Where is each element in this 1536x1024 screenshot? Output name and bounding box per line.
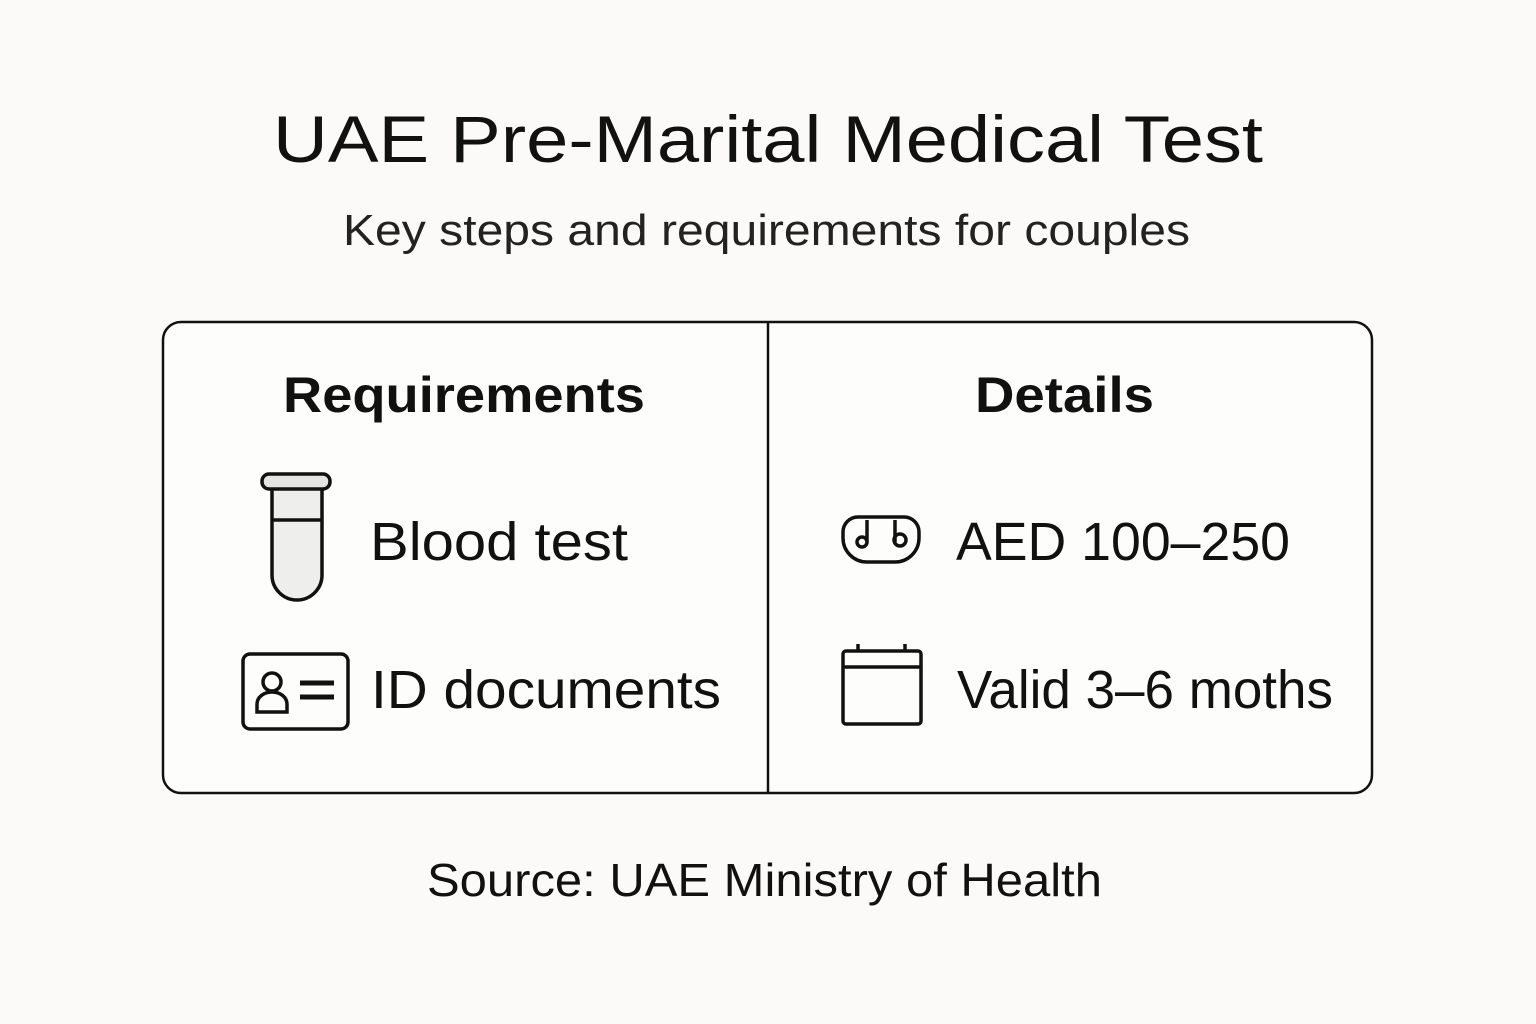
source: Source: UAE Ministry of Health (427, 854, 1102, 906)
text: cost: AED 100–250 (956, 512, 1290, 572)
text: blood test: Blood test (370, 512, 628, 572)
subtitle: Key steps and requirements for couples (343, 206, 1190, 255)
text: validity: Valid 3–6 moths (957, 660, 1333, 720)
icon: money (843, 517, 919, 562)
icon: calendar (843, 644, 921, 724)
icon: id card (243, 654, 348, 729)
title: UAE Pre-Marital Medical Test (273, 102, 1263, 176)
heading: requirements: Requirements (283, 367, 645, 423)
panel: table (163, 322, 1372, 793)
heading: details: Details (975, 367, 1154, 423)
text: id documents: ID documents (371, 660, 721, 720)
icon: test tube (262, 474, 330, 600)
